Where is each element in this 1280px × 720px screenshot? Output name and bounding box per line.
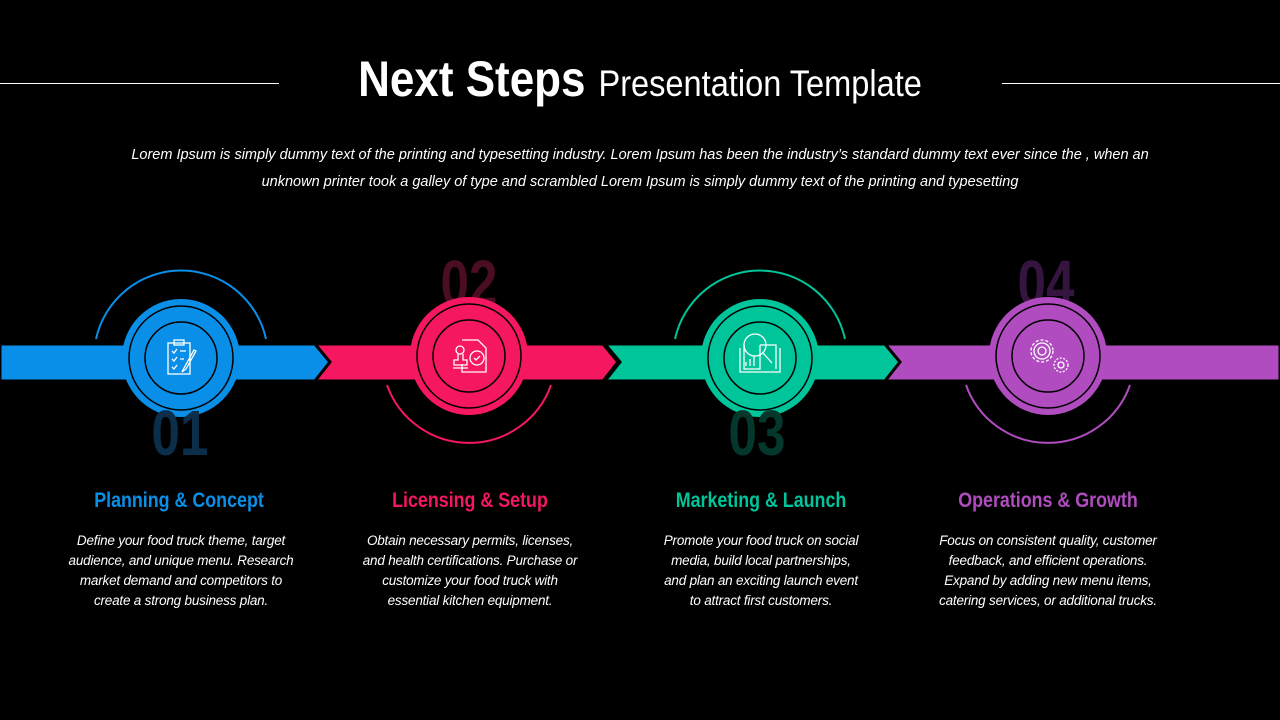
step 4 circle <box>989 297 1107 415</box>
text 1: Define your food truck theme, target audience, and unique menu. Research market demand and competitors to create a strong business plan. <box>69 533 293 608</box>
number 03: 03 <box>729 399 785 469</box>
process timeline <box>2 249 1278 469</box>
step 2 circle <box>410 297 528 415</box>
intro text: unknown printer took a galley of type and scrambled Lorem Ipsum is simply dummy text of the printing and typesetting <box>262 174 1018 190</box>
number 02: 02 <box>441 249 497 319</box>
heading 2: Licensing & Setup <box>392 489 548 512</box>
text 2: Obtain necessary permits, licenses, and health certifications. Purchase or customize your food truck with essential kitchen equipment. <box>363 533 577 608</box>
heading 3: Marketing & Launch <box>676 489 846 512</box>
text 3: Promote your food truck on social media, build local partnerships, and plan an exciting launch event to attract first customers. <box>664 533 858 608</box>
intro text: Lorem Ipsum is simply dummy text of the printing and typesetting industry. Lorem Ipsum has been the industry’s standard dummy text ever since the , when an <box>131 147 1149 163</box>
number 04: 04 <box>1018 249 1074 319</box>
intro text <box>131 147 1149 190</box>
heading 4: Operations & Growth <box>958 489 1138 512</box>
step 1 circle <box>122 299 240 417</box>
number 01: 01 <box>152 399 208 469</box>
arcs <box>96 271 1130 443</box>
text 4: Focus on consistent quality, customer feedback, and efficient operations. Expand by adding new menu items, catering services, or additional trucks. <box>939 533 1157 608</box>
heading 1: Planning & Concept <box>94 489 264 512</box>
title: Next Steps Presentation Template <box>358 51 922 107</box>
step 3 circle <box>701 299 819 417</box>
arrow bars <box>0 344 1280 381</box>
